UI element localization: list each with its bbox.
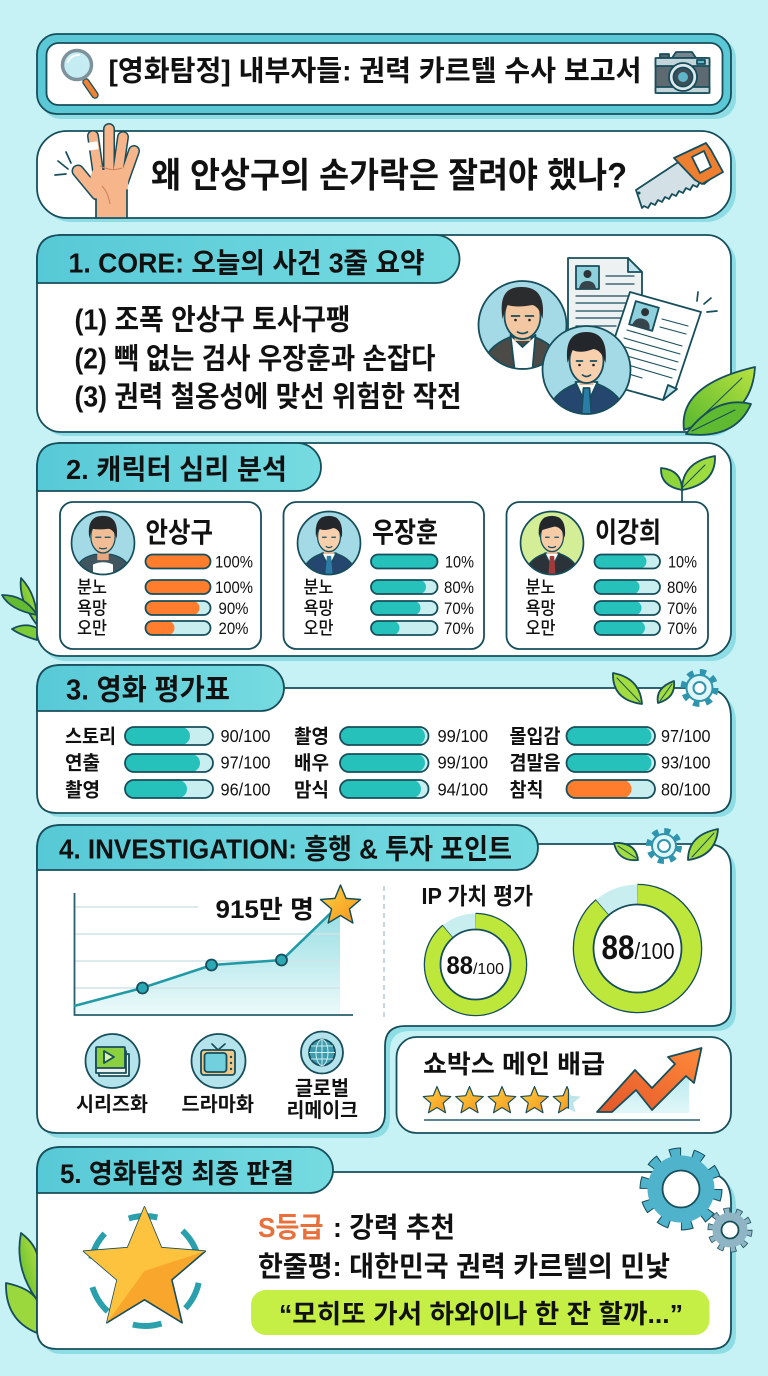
- donut: large IP score: [583, 894, 692, 1003]
- bar table: column 2: [294, 726, 488, 802]
- icon: hand with cut finger: [55, 129, 134, 218]
- label: drama: 드라마화: [182, 1093, 254, 1116]
- panel: section 4 investigation: [37, 825, 736, 1138]
- icon: rating stars: [423, 1086, 581, 1113]
- bar table: column 3: 몰입감: [510, 726, 561, 748]
- bar rows: 이강희: 80%: [667, 578, 697, 597]
- label: global remake: 글로벌: [295, 1077, 349, 1100]
- bar rows: 안상구: 20%: [218, 619, 248, 638]
- panel: section 1 core: [37, 235, 755, 436]
- portrait: 우장훈: [298, 512, 360, 574]
- icon: portrait anti hero: [478, 281, 566, 369]
- donut: large IP score: /100: [634, 938, 674, 964]
- bar rows: 우장훈: 70%: [444, 599, 474, 618]
- bar table: column 2: 99/100: [438, 726, 488, 746]
- bar rows: 이강희: 오만: [526, 618, 556, 638]
- bar table: column 2: 배우: [294, 752, 329, 774]
- bar table: column 1: 촬영: [65, 780, 100, 802]
- icon: leaves: [684, 367, 755, 435]
- icon: gears: [645, 1153, 749, 1249]
- bar rows: 우장훈: 80%: [444, 578, 474, 597]
- bar rows: 안상구: 100%: [215, 552, 253, 572]
- bar rows: 안상구: 욕망: [77, 598, 107, 618]
- label: global remake: [286, 1077, 358, 1122]
- portrait: 이강희: [521, 512, 583, 574]
- bar table: column 3: 97/100: [661, 726, 711, 746]
- heading: showbox: 쇼박스 메인 배급: [423, 1051, 605, 1079]
- icon: left leaves: [6, 1233, 38, 1333]
- donut: small IP score: 88: [446, 952, 473, 980]
- label: series: 시리즈화: [76, 1093, 148, 1116]
- bar rows: 이강희: 70%: [667, 599, 697, 618]
- icon: globe: [301, 1032, 343, 1074]
- icon: saw: [636, 143, 723, 208]
- bar table: column 2: 94/100: [438, 780, 488, 800]
- panel: section 2 character analysis: [2, 443, 736, 661]
- icon: portrait prosecutor: [542, 326, 630, 414]
- bar rows: 안상구: 90%: [218, 599, 248, 618]
- donut: small IP score: [432, 921, 519, 1008]
- heading: section 4: 4. INVESTIGATION: 흥행 & 투자 포인트: [59, 834, 512, 864]
- card: showbox distribution: [396, 1037, 731, 1133]
- icon: left leaves: [2, 578, 37, 640]
- card: 우장훈: [284, 502, 484, 649]
- heading: section 1: [37, 235, 460, 283]
- donut: large IP score: 88: [602, 929, 634, 967]
- icon: star: [321, 885, 360, 923]
- bar table: column 3: [510, 726, 711, 802]
- chart label: 915만 명: 915만 명: [216, 896, 314, 924]
- heading: section 3: 3. 영화 평가표: [66, 674, 230, 706]
- bar table: column 1: 97/100: [220, 752, 271, 772]
- bar rows: 우장훈: 10%: [445, 552, 474, 572]
- bar rows: 우장훈: 욕망: [304, 598, 334, 618]
- bar rows: 안상구: 분노: [77, 578, 107, 598]
- icon: dossier documents: [568, 258, 717, 400]
- icon: rising arrow: [597, 1048, 702, 1113]
- heading: section 1: 1. CORE: 오늘의 사건 3줄 요약: [68, 248, 424, 278]
- bar table: column 2: 맘식: [294, 780, 329, 802]
- bar table: column 1: 스토리: [65, 726, 116, 748]
- text: one line review: 한줄평: 대한민국 권력 카르텔의 민낯: [258, 1251, 670, 1282]
- icon: leaves and gear: [614, 829, 718, 861]
- text: grade: [258, 1212, 455, 1243]
- text: grade: S등급: [258, 1212, 324, 1243]
- name: 이강희: 이강희: [595, 517, 661, 548]
- title text: [영화탐정] 내부자들: 권력 카르텔 수사 보고서: [108, 56, 642, 88]
- bar rows: 이강희: 70%: [667, 619, 697, 638]
- card: 이강희: [506, 502, 708, 649]
- bar table: column 1: 연출: [65, 752, 100, 774]
- bar rows: 이강희: 분노: [526, 578, 556, 598]
- text block: three line summary: (2) 빽 없는 검사 우장훈과 손잡다: [74, 342, 436, 376]
- question text: 왜 안상구의 손가락은 잘려야 했나?: [151, 156, 627, 196]
- bar rows: 이강희: [526, 552, 697, 638]
- icon: camera: [656, 52, 710, 93]
- bar table: column 1: 96/100: [220, 780, 271, 800]
- bar table: column 3: 80/100: [661, 780, 711, 800]
- text block: three line summary: (3) 권력 철옹성에 맞선 위험한 작전: [74, 380, 462, 414]
- text block: three line summary: (1) 조폭 안상구 토사구팽: [74, 304, 350, 336]
- heading: section 3: [37, 665, 284, 711]
- bar table: column 2: 99/100: [438, 752, 488, 772]
- icon: leaves and gear: [613, 672, 716, 704]
- text: grade: : 강력 추천: [333, 1212, 455, 1243]
- bar rows: 우장훈: [304, 552, 474, 638]
- heading: section 5: [37, 1147, 333, 1193]
- heading: IP value: IP 가치 평가: [422, 883, 533, 909]
- bar table: column 1: 90/100: [220, 726, 271, 746]
- callout: quote: “모히또 가서 하와이나 한 잔 할까...”: [279, 1299, 683, 1329]
- bar rows: 안상구: [77, 552, 253, 638]
- chart: audience line chart: [74, 885, 360, 1015]
- bar rows: 안상구: 오만: [77, 618, 107, 638]
- panel: section 5 final verdict: [6, 1147, 749, 1354]
- bar table: column 3: 참칙: [510, 780, 544, 802]
- card: 안상구: [60, 502, 261, 649]
- portrait: 안상구: [72, 512, 134, 574]
- bar rows: 안상구: 100%: [215, 578, 253, 597]
- callout: quote: [251, 1290, 710, 1335]
- bar rows: 우장훈: 오만: [304, 618, 334, 638]
- panel: question banner: [37, 129, 736, 222]
- bar rows: 우장훈: 분노: [304, 578, 334, 598]
- divider: [383, 886, 385, 1020]
- icon: big star with ring: [84, 1207, 205, 1326]
- icon: series: [86, 1034, 140, 1088]
- icon: sprout: [661, 456, 715, 502]
- icon: magnifying glass: [62, 50, 95, 95]
- heading: section 2: [37, 443, 321, 491]
- heading: section 5: 5. 영화탐정 최종 판결: [60, 1159, 294, 1189]
- donut: small IP score: /100: [473, 961, 504, 978]
- bar table: column 3: 93/100: [661, 752, 711, 772]
- bar table: column 3: 겸말음: [510, 752, 561, 774]
- name: 우장훈: 우장훈: [372, 517, 438, 548]
- bar table: column 2: 촬영: [294, 726, 329, 748]
- bar table: column 1: [65, 726, 271, 802]
- label: global remake: 리메이크: [286, 1099, 358, 1122]
- name: 안상구: 안상구: [146, 517, 213, 548]
- panel: title banner: [37, 34, 736, 119]
- icon: television: [192, 1034, 246, 1088]
- bar rows: 이강희: 욕망: [526, 598, 556, 618]
- bar rows: 우장훈: 70%: [444, 619, 474, 638]
- heading: section 2: 2. 캐릭터 심리 분석: [66, 454, 287, 485]
- text block: three line summary: [74, 304, 462, 414]
- panel: section 3 movie rating table: [37, 665, 736, 817]
- bar rows: 이강희: 10%: [668, 552, 697, 572]
- heading: section 4: [37, 825, 538, 870]
